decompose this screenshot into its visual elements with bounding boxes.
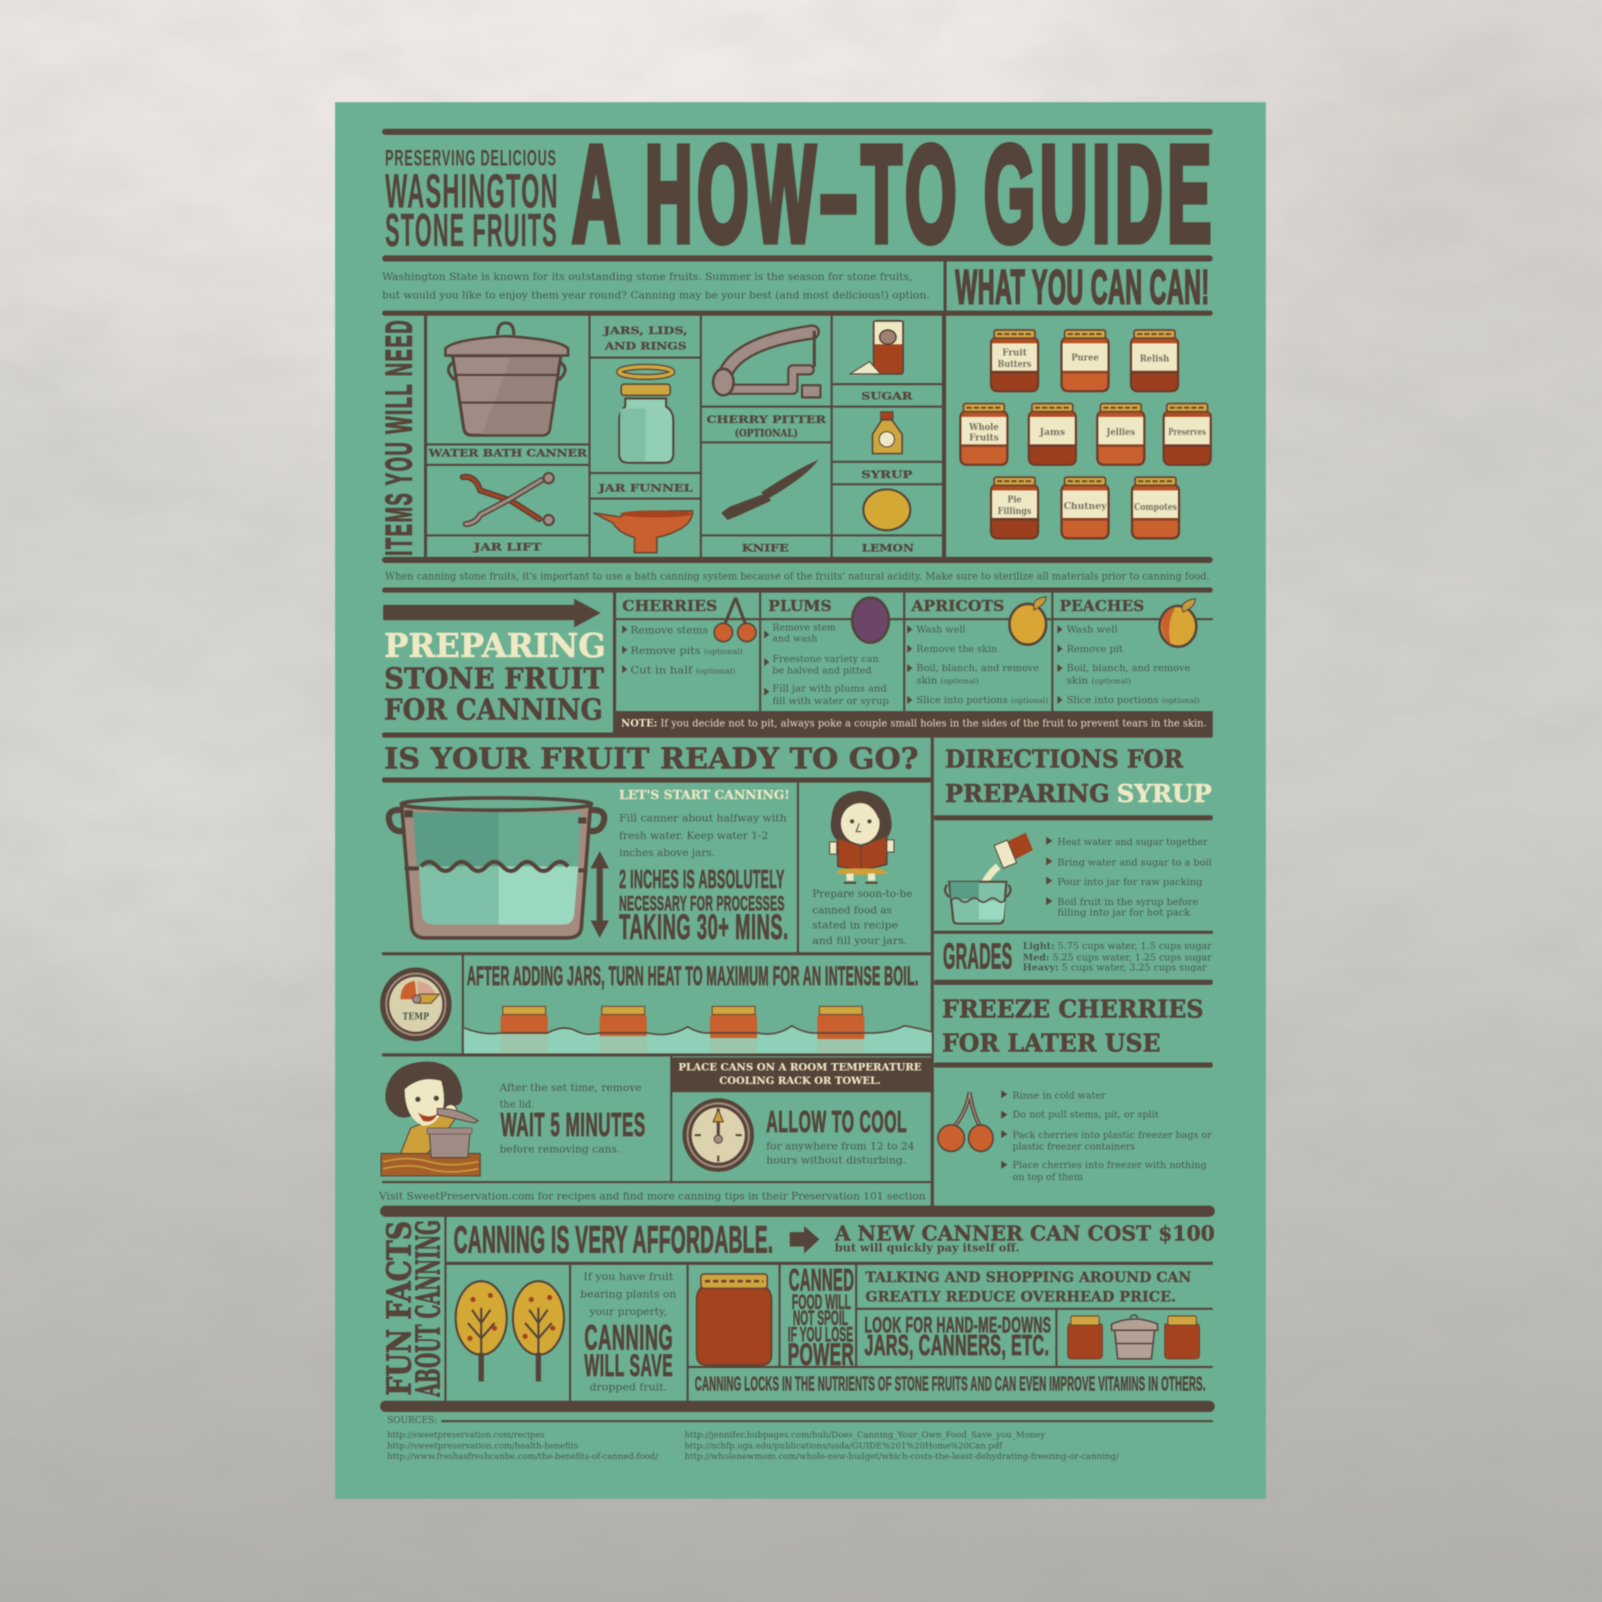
text: hand-me-downs: LOOK FOR HAND-ME-DOWNS — [864, 1312, 1051, 1337]
list: syrup directions: Boil fruit in the syrup before — [1057, 897, 1198, 908]
label: knife: KNIFE — [742, 543, 789, 555]
icon: big jar — [697, 1274, 771, 1365]
jar: chutney: Chutney — [1064, 501, 1107, 512]
label: jars lids and rings: AND RINGS — [604, 340, 687, 352]
icon: knife — [721, 460, 818, 520]
poster: WHAT YOU CAN CAN! — [955, 261, 1210, 314]
jar: preserves: Preserves — [1168, 427, 1206, 438]
icon: cherry pitter — [713, 332, 820, 397]
arrow: affordable — [790, 1226, 819, 1254]
section frame: preparing — [382, 587, 1213, 738]
icon: fruit trees — [456, 1281, 564, 1381]
intro text: but would you like to enjoy them year round? Canning may be your best (and most delicious!) option. — [382, 289, 930, 301]
label: syrup: SYRUP — [861, 469, 913, 481]
section frame: lower grid — [382, 736, 1213, 1208]
text: canning will save: WILL SAVE — [584, 1347, 673, 1383]
label: sugar: SUGAR — [861, 390, 913, 402]
text: canning will save: your property, — [588, 1307, 667, 1318]
note bar: NOTE: If you decide not to pit, always poke a couple small holes in the sides of the fruit to prevent tears in the skin. — [621, 717, 1207, 729]
panel: apricots: Boil, blanch, and remove — [916, 663, 1039, 674]
icon: temperature gauge — [380, 968, 452, 1041]
text: prepare food — [812, 889, 912, 947]
panel: apricots — [907, 597, 1048, 706]
text: hand-me-downs — [864, 1312, 1051, 1362]
list: syrup directions: filling into jar for hot pack — [1057, 907, 1191, 918]
list: syrup directions: Bring water and sugar to a boil — [1057, 857, 1212, 868]
jar: puree — [1062, 330, 1109, 391]
panel: peaches: Boil, blanch, and remove — [1067, 663, 1190, 674]
callout: 2 inches: 2 INCHES IS ABSOLUTELY — [619, 866, 785, 894]
panel: apricots: Wash well — [916, 624, 966, 635]
jar: fruit butters — [991, 330, 1038, 391]
panel: plums: PLUMS — [768, 597, 832, 615]
sources: http://nchfp.uga.edu/publications/usda/GUIDE%201%20Home%20Can.pdf — [685, 1441, 1003, 1451]
text: prepare food: stated in recipe — [812, 921, 898, 932]
intro text — [382, 272, 930, 301]
banner: place cans — [671, 1057, 932, 1092]
panel: plums: Freestone variety can — [772, 654, 879, 665]
sources: SOURCES: — [387, 1415, 437, 1426]
text: let's start canning — [619, 788, 790, 859]
note: bath canning: When canning stone fruits, it's important to use a bath canning system because of the fruits' natural acidity. Make sure to sterilize all materials prior to canning food. — [385, 571, 1210, 582]
sources: http://jennifer.hubpages.com/hub/Does_Canning_Your_Own_Food_Save_you_Money — [685, 1430, 1046, 1440]
banner: place cans: PLACE CANS ON A ROOM TEMPERATURE — [678, 1062, 922, 1074]
icon: jar lift — [463, 473, 554, 525]
icon: clock — [682, 1098, 754, 1172]
jar: preserves — [1164, 404, 1211, 465]
intro text: Washington State is known for its outstanding stone fruits. Summer is the season for stone fruits, — [382, 272, 912, 283]
grades — [943, 937, 1212, 977]
icon: big canner with water — [389, 798, 604, 938]
poster: STONE FRUITS — [385, 204, 558, 256]
panel: apricots: Remove the skin — [916, 644, 997, 655]
text: talking and shopping — [865, 1270, 1191, 1306]
list: syrup directions: Pour into jar for raw packing — [1057, 877, 1203, 888]
panel: apricots: Slice into portions (optional) — [916, 695, 1048, 706]
icon: sugar — [850, 321, 903, 374]
list: freeze directions: Place cherries into freezer with nothing — [1012, 1160, 1207, 1171]
jar: jellies: Jellies — [1106, 427, 1135, 438]
poster: IF YOU LOSE — [788, 1322, 853, 1346]
heading: preparing stone fruit for canning: FOR CANNING — [384, 692, 603, 726]
text: wait 5 minutes: After the set time, remove — [499, 1083, 642, 1094]
sources — [387, 1415, 1213, 1461]
sources: http://wholenewmom.com/whole-new-budget/which-costs-the-least-dehydrating-freezing-or-canning/ — [685, 1451, 1119, 1461]
label: jar funnel: JAR FUNNEL — [597, 482, 693, 494]
jar: compotes — [1132, 477, 1179, 538]
text: let's start canning: inches above jars. — [619, 848, 715, 859]
icon: cherries — [714, 598, 756, 642]
grades: Light: 5.75 cups water, 1.5 cups sugar — [1023, 941, 1212, 952]
text: prepare food: and fill your jars. — [812, 936, 907, 947]
panel: plums: Remove stem — [772, 622, 836, 633]
icon: temperature gauge: TEMP — [403, 1012, 429, 1023]
grades: GRADES — [943, 937, 1012, 977]
icon: pouring syrup — [945, 833, 1033, 924]
panel: peaches: skin (optional) — [1067, 676, 1131, 687]
text: canned food will not spoil — [788, 1261, 854, 1372]
label: lemon: LEMON — [862, 543, 914, 555]
text: talking and shopping: GREATLY REDUCE OVERHEAD PRICE. — [865, 1290, 1176, 1306]
text: allow to cool: ALLOW TO COOL — [766, 1105, 907, 1139]
jar: chutney — [1062, 477, 1109, 538]
icon: freeze cherries — [938, 1092, 993, 1151]
panel: plums — [764, 597, 889, 707]
panel: peaches: Wash well — [1067, 624, 1118, 635]
heading: preparing stone fruit for canning: PREPARING — [384, 626, 606, 665]
heading: canning is very affordable: CANNING IS VERY AFFORDABLE. — [454, 1220, 773, 1262]
text: wait 5 minutes: the lid. — [500, 1100, 534, 1111]
text: canning will save: dropped fruit. — [590, 1383, 667, 1394]
text: prepare food: Prepare soon-to-be — [812, 889, 912, 900]
text: canned food will not spoil: NOT SPOIL — [793, 1306, 848, 1330]
panel: peaches — [1057, 597, 1200, 706]
text: let's start canning: fresh water. Keep water 1-2 — [619, 831, 768, 842]
panel: peaches: Remove pit — [1067, 644, 1123, 655]
icon: glass jar with lid and ring — [619, 367, 673, 463]
text: wait 5 minutes: WAIT 5 MINUTES — [501, 1106, 646, 1144]
arrow: two inches — [591, 851, 609, 938]
panel: cherries: Remove stems — [630, 625, 708, 636]
icon: peach — [1160, 599, 1196, 647]
heading: directions for preparing syrup: SYRUP — [1117, 779, 1212, 808]
banner: place cans: COOLING RACK OR TOWEL. — [719, 1075, 881, 1087]
section frame: items — [382, 260, 1213, 563]
list: syrup directions — [1046, 837, 1212, 918]
text: allow to cool: for anywhere from 12 to 24 — [766, 1141, 914, 1152]
icon: woman with pot — [381, 1062, 480, 1176]
text: new canner cost: A NEW CANNER CAN COST $100 — [834, 1221, 1215, 1245]
poster panel — [335, 102, 1266, 1499]
text: allow to cool: hours without disturbing. — [766, 1156, 906, 1167]
panel: plums: Fill jar with plums and — [772, 684, 887, 695]
text: canning will save: bearing plants on — [580, 1290, 677, 1301]
header rules — [382, 129, 1213, 262]
grades: Heavy: 5 cups water, 3.25 cups sugar — [1023, 963, 1207, 974]
list: freeze directions: plastic freezer containers — [1012, 1141, 1135, 1152]
jar: jams — [1029, 404, 1076, 465]
panel: plums: fill with water or syrup — [772, 696, 889, 707]
panel: cherries: CHERRIES — [622, 597, 717, 615]
grades: Med: 5.25 cups water, 1.25 cups sugar — [1023, 952, 1212, 963]
icon: plum — [852, 598, 889, 643]
text: new canner cost: but will quickly pay itself off. — [835, 1242, 1020, 1255]
callout: 2 inches — [619, 866, 789, 947]
heading: freeze cherries: FOR LATER USE — [942, 1028, 1161, 1057]
icon: lemon — [863, 489, 910, 530]
list: syrup directions: Heat water and sugar together — [1057, 837, 1208, 848]
vertical heading: fun facts about canning: ABOUT CANNING — [408, 1220, 447, 1397]
icons: jars and canner — [1068, 1315, 1199, 1359]
illustration: jars in boiling water — [464, 1006, 932, 1053]
text: let's start canning: LET'S START CANNING! — [619, 788, 790, 802]
jar: whole fruits: Whole — [968, 422, 999, 433]
jar: whole fruits: Fruits — [969, 432, 999, 443]
heading: directions for preparing syrup: DIRECTIONS FOR — [945, 744, 1184, 773]
vertical heading: items you will need: ITEMS YOU WILL NEED — [379, 319, 420, 556]
panel: cherries — [622, 597, 756, 676]
list: freeze directions: Do not pull stems, pit, or split — [1012, 1110, 1159, 1121]
heading: is your fruit ready: IS YOUR FRUIT READY TO GO? — [384, 741, 918, 775]
arrow: preparing — [383, 599, 601, 627]
jar: relish: Relish — [1140, 354, 1170, 365]
text: canned food will not spoil: FOOD WILL — [792, 1290, 851, 1314]
jar: pie fillings: Fillings — [998, 506, 1031, 517]
panel: plums: and wash — [772, 634, 817, 645]
heading: preparing stone fruit for canning: STONE FRUIT — [384, 662, 604, 696]
heading: directions for preparing syrup — [945, 744, 1212, 808]
panel: cherries: Remove pits (optional) — [630, 646, 743, 657]
heading: preparing stone fruit for canning — [384, 626, 606, 726]
text: prepare food: canned food as — [812, 905, 892, 916]
label: cherry pitter: (OPTIONAL) — [735, 427, 798, 439]
text: hand-me-downs: JARS, CANNERS, ETC. — [864, 1330, 1049, 1362]
label: jars lids and rings — [603, 325, 688, 352]
label: jars lids and rings: JARS, LIDS, — [603, 325, 688, 337]
text: canning will save: If you have fruit — [583, 1272, 674, 1283]
panel: peaches: Slice into portions (optional) — [1067, 695, 1200, 706]
jar: jams: Jams — [1039, 427, 1065, 438]
poster: AFTER ADDING JARS, TURN HEAT TO MAXIMUM FOR AN INTENSE BOIL. — [467, 961, 918, 991]
poster: WASHINGTON — [385, 165, 559, 218]
title: subtitle block: PRESERVING DELICIOUS — [385, 146, 557, 171]
jar: compotes: Compotes — [1134, 502, 1177, 513]
sources: http://www.freshasfreshcanbe.com/the-benefits-of-canned-food/ — [387, 1451, 658, 1461]
sources: http://sweetpreservation.com/health-benefits — [387, 1441, 578, 1451]
text: talking and shopping: TALKING AND SHOPPING AROUND CAN — [865, 1270, 1191, 1286]
icon: girl reading — [830, 791, 894, 883]
poster — [335, 102, 1266, 1499]
jar: fruit butters: Fruit — [1002, 348, 1028, 359]
vertical heading: fun facts about canning — [380, 1220, 447, 1397]
text: wait 5 minutes: before removing cans. — [500, 1144, 620, 1155]
label: cherry pitter: CHERRY PITTER — [706, 414, 827, 426]
panel: apricots: APRICOTS — [910, 597, 1004, 615]
poster: CANNED — [789, 1261, 854, 1297]
icon: jar funnel — [594, 510, 693, 553]
heading: directions for preparing syrup: PREPARING — [945, 779, 1110, 808]
panel: apricots: skin (optional) — [916, 676, 979, 687]
panel: peaches: PEACHES — [1059, 597, 1144, 615]
text: canning will save: CANNING — [584, 1320, 673, 1358]
jar: jellies — [1097, 404, 1144, 465]
panel: plums: be halved and pitted — [772, 665, 872, 676]
label: jar lift: JAR LIFT — [473, 542, 542, 554]
callout: 2 inches: TAKING 30+ MINS. — [619, 909, 789, 947]
list: freeze directions: Rinse in cold water — [1012, 1090, 1106, 1101]
sources: http://sweetpreservation.com/recipes — [387, 1430, 545, 1440]
jar: pie fillings: Pie — [1007, 495, 1022, 506]
text: let's start canning: Fill canner about halfway with — [619, 813, 787, 824]
visit link line: Visit SweetPreservation.com for recipes and find more canning tips in their Preservation 101 section — [378, 1191, 926, 1202]
vertical heading: fun facts about canning: FUN FACTS — [380, 1221, 419, 1396]
list: freeze directions: Pack cherries into plastic freezer bags or — [1012, 1130, 1212, 1141]
text: canned food will not spoil: POWER — [788, 1336, 854, 1372]
jar: relish — [1131, 330, 1178, 391]
text: wait 5 minutes — [499, 1083, 646, 1155]
callout: 2 inches: NECESSARY FOR PROCESSES — [619, 891, 785, 915]
icon: water bath canner — [445, 323, 568, 435]
icon: syrup bottle — [873, 412, 902, 454]
jar: puree: Puree — [1071, 353, 1099, 364]
heading: freeze cherries — [942, 995, 1204, 1057]
list: freeze directions: on top of them — [1012, 1172, 1083, 1183]
list: freeze directions — [1001, 1090, 1212, 1183]
jar: whole fruits — [960, 404, 1007, 465]
title: subtitle block — [385, 146, 559, 256]
icon: apricot — [1009, 597, 1046, 645]
text: allow to cool — [766, 1105, 914, 1167]
panel: cherries: Cut in half (optional) — [630, 665, 736, 676]
section frame: fun facts — [380, 1206, 1215, 1412]
heading: freeze cherries: FREEZE CHERRIES — [942, 995, 1204, 1024]
note bar — [616, 711, 1213, 737]
jar: pie fillings — [991, 477, 1038, 538]
label: cherry pitter — [706, 414, 827, 439]
text: canning will save — [580, 1272, 677, 1394]
label: water bath canner: WATER BATH CANNER — [427, 448, 588, 460]
jar: fruit butters: Butters — [998, 359, 1031, 370]
